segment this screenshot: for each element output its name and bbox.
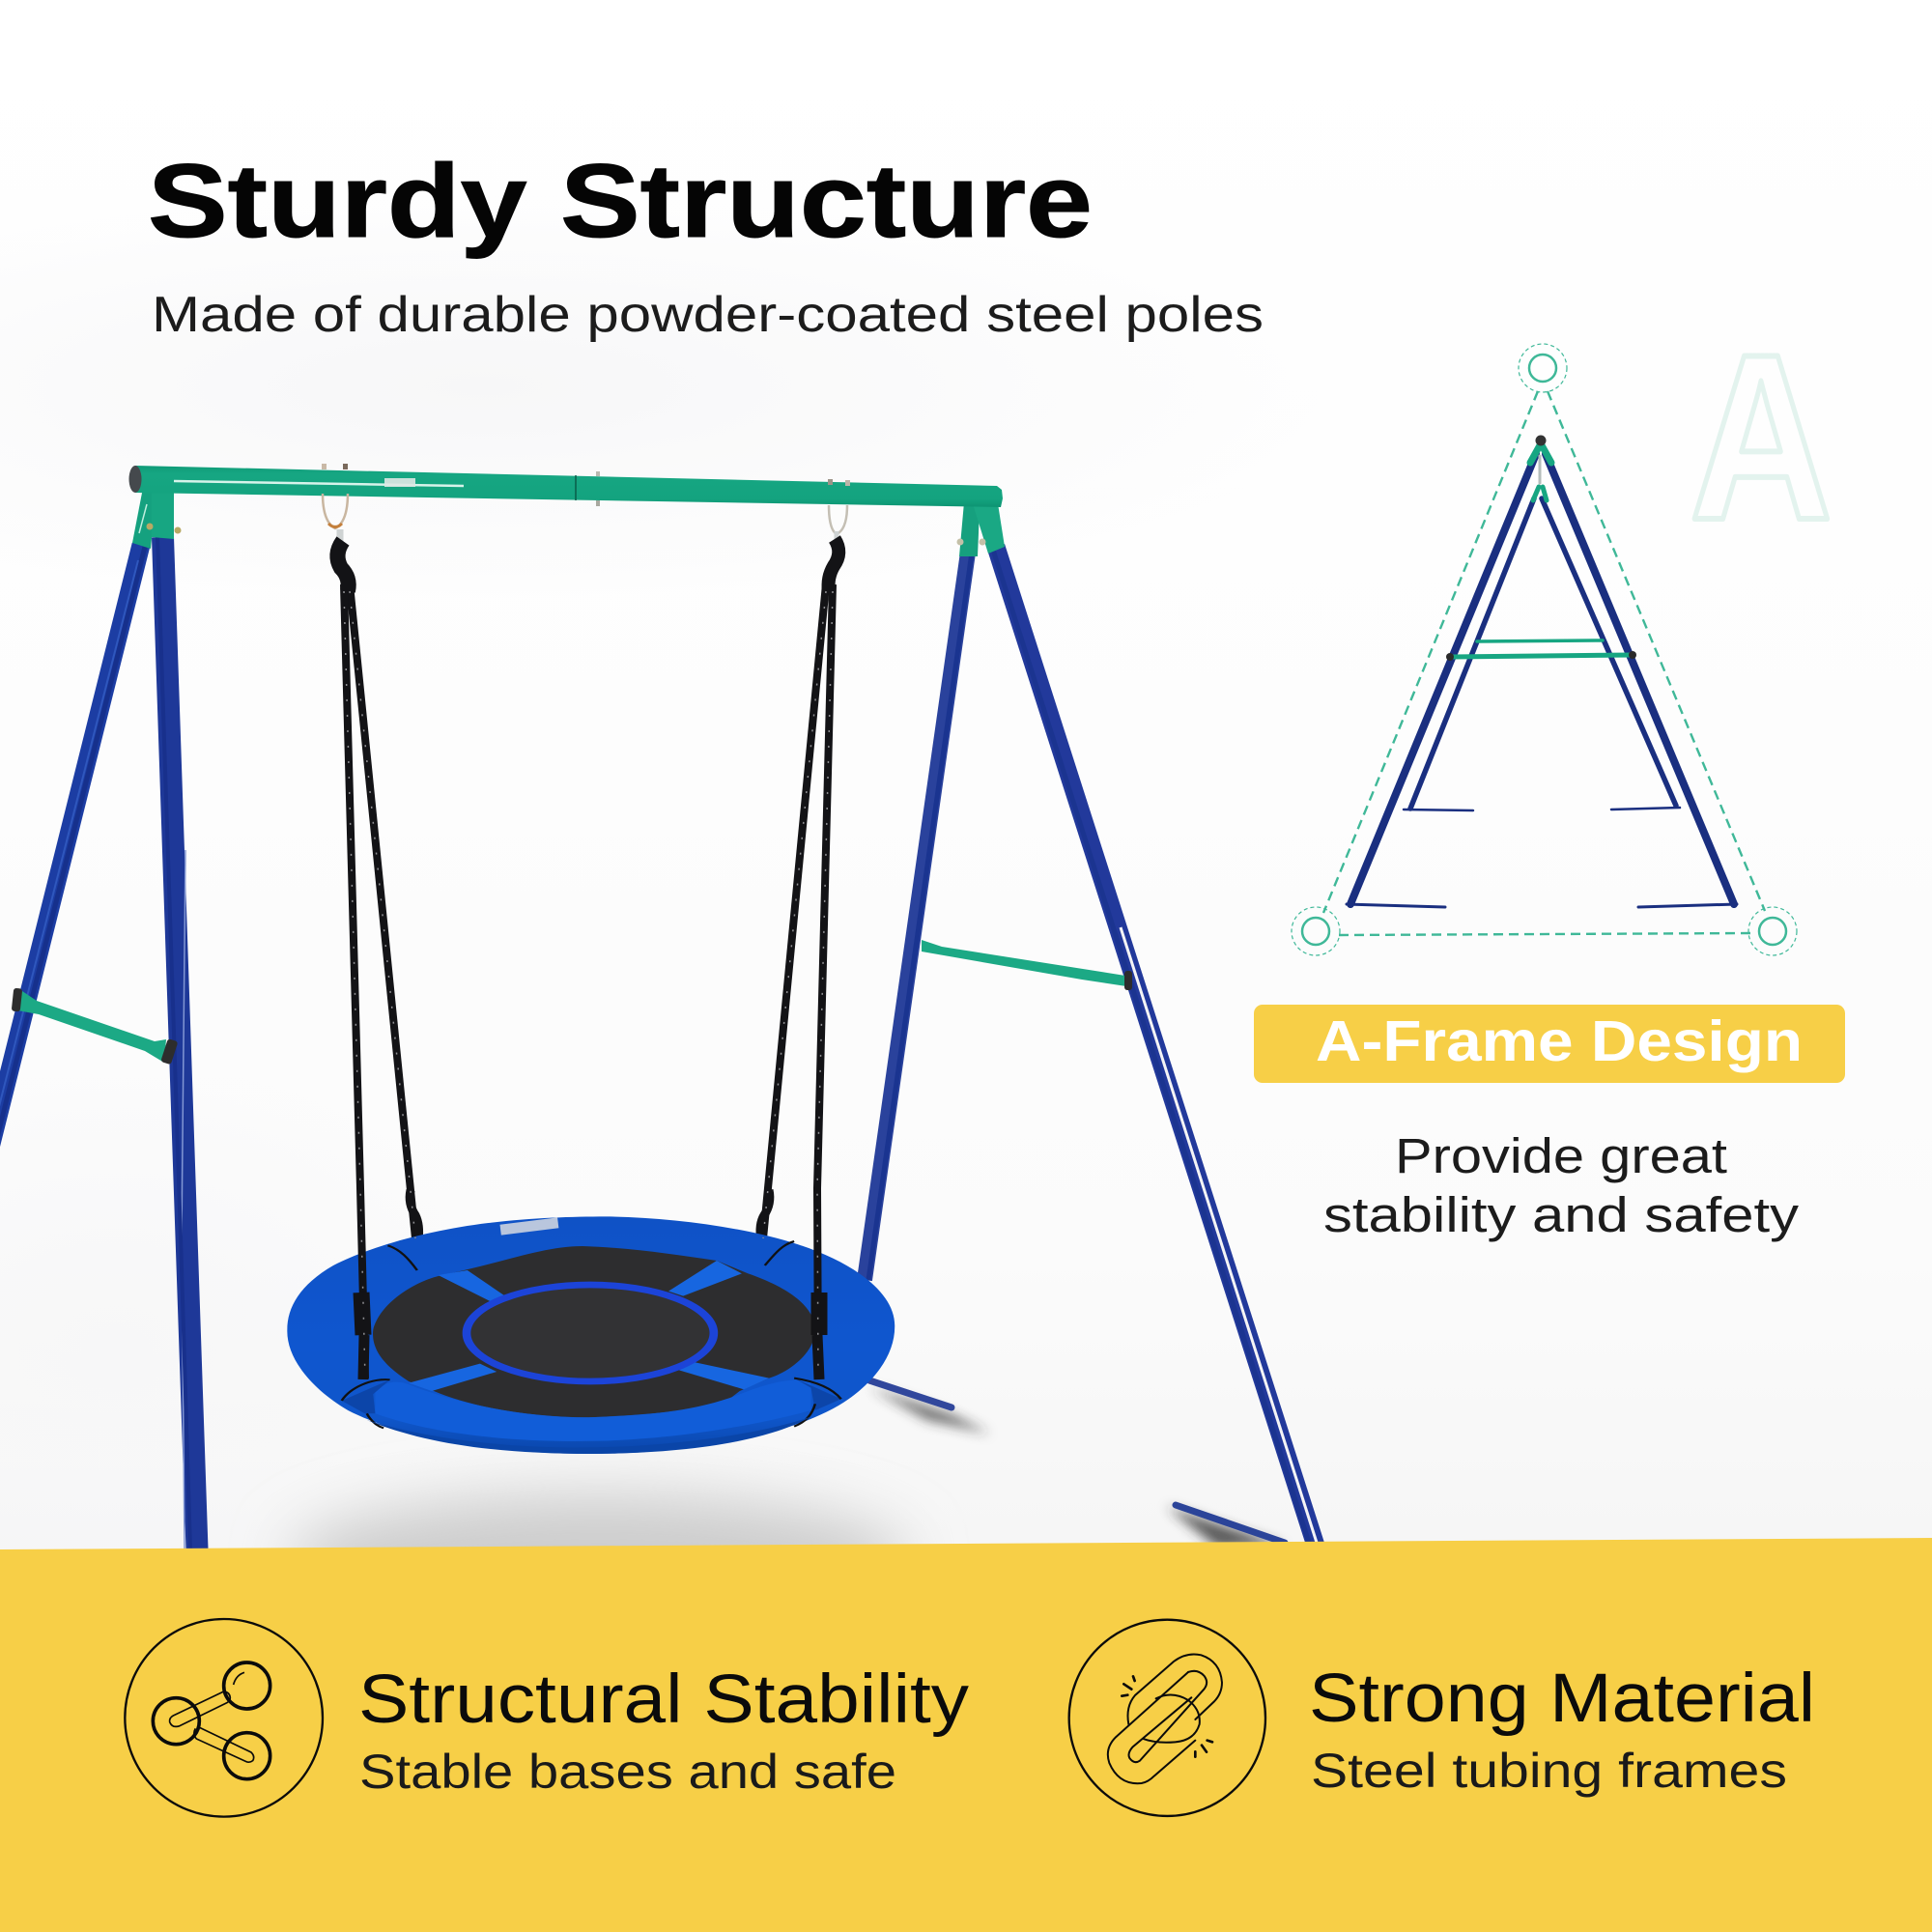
title: Sturdy Structure (148, 142, 1093, 259)
subheading: Steel tubing frames (1311, 1744, 1787, 1798)
inner ropes (350, 584, 826, 1240)
corner nodes (1292, 344, 1797, 955)
outer ropes (337, 539, 838, 1379)
right hanger (829, 505, 847, 541)
foot shadows (869, 1387, 1285, 1548)
seat shapes (287, 1216, 895, 1454)
seat logo (499, 1217, 558, 1236)
heading: Structural Stability (358, 1662, 970, 1738)
callout: A-Frame Design: A-Frame Design (1316, 1009, 1803, 1073)
feature: structural stability (125, 1619, 970, 1817)
swing set illustration (0, 464, 1318, 1549)
swing seat (287, 1216, 895, 1454)
top beam (129, 464, 1003, 507)
rear right leg (865, 553, 972, 1280)
left hanger (323, 494, 348, 543)
description text: Provide great (1395, 1128, 1727, 1183)
rear left leg (0, 545, 145, 1188)
icon: connected nodes (125, 1619, 323, 1817)
front left leg (157, 537, 197, 1549)
feature: strong material (1069, 1620, 1815, 1816)
subtitle: Made of durable powder-coated steel poles (152, 287, 1264, 343)
frame front view (1347, 435, 1737, 907)
subheading: Stable bases and safe (359, 1745, 896, 1799)
ground shadow under swing (290, 1494, 908, 1626)
callout: A-Frame Design (1254, 1005, 1845, 1083)
rope flecks (344, 591, 833, 1378)
right joint (956, 497, 1005, 556)
heading: Strong Material (1309, 1661, 1815, 1737)
front right leg (992, 547, 1318, 1546)
rear right foot (869, 1380, 952, 1407)
left joint (132, 477, 182, 549)
watermark letter A: A (1690, 304, 1833, 569)
description text: stability and safety (1323, 1187, 1800, 1242)
dashed triangle (1323, 391, 1765, 935)
icon: chain links (1069, 1620, 1265, 1816)
right brace (922, 940, 1132, 990)
description text (1323, 1128, 1800, 1242)
yellow footer band (0, 1538, 1932, 1932)
front right foot (1176, 1505, 1285, 1543)
left brace (12, 988, 178, 1065)
A-frame diagram (1292, 344, 1797, 955)
